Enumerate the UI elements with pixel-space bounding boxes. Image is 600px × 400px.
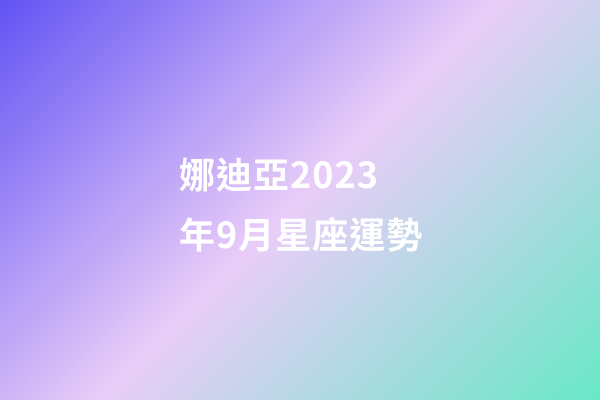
title: 娜迪亞2023: [179, 147, 379, 199]
title: [179, 147, 423, 259]
title: 年9月星座運勢: [179, 207, 423, 259]
